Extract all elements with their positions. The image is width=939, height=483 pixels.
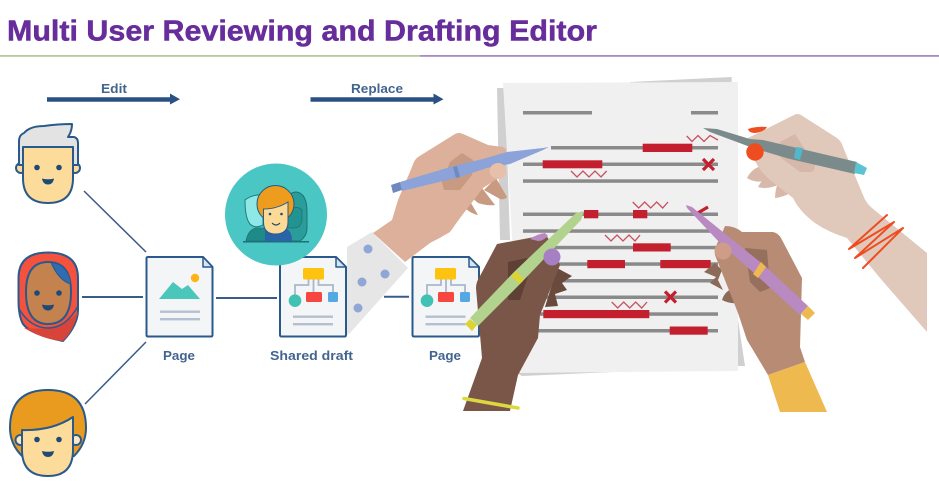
cuff (768, 362, 827, 412)
label: Page: Page (163, 348, 195, 363)
bracelet (464, 398, 518, 408)
hand: tan hand with blue pen (373, 133, 549, 262)
arrow: Replace (310, 81, 444, 104)
arrow: Replace: Replace (351, 81, 403, 96)
pen: purple (686, 205, 808, 315)
label: Shared draft: Shared draft (270, 348, 354, 363)
bracelet (849, 215, 903, 268)
icon: team badge (225, 164, 327, 266)
document: Page (146, 257, 212, 363)
hand: dark hand with green pen (463, 211, 584, 411)
text lines on paper (523, 111, 718, 332)
pen: grey (703, 128, 857, 174)
squiggle and cross marks (571, 136, 718, 308)
sleeve (347, 232, 408, 335)
person with orange hair (265, 229, 292, 241)
red edit highlights (543, 144, 711, 335)
document: Page (replaced) (412, 257, 479, 363)
arrow: Edit: Edit (101, 81, 128, 96)
pen: blue (400, 147, 549, 191)
man with pale hair (245, 195, 263, 227)
hand: brown hand with purple pen (686, 205, 827, 412)
woman in teal hijab (285, 192, 307, 241)
arrow: Edit (47, 81, 180, 104)
icon: user with grey hair (16, 124, 80, 203)
pen: green (470, 211, 584, 326)
document: Shared draft (270, 257, 354, 363)
paper stack (497, 77, 745, 376)
connector lines (82, 191, 409, 404)
icon: user with red hijab (18, 252, 78, 341)
icon: user with orange hair (10, 390, 86, 476)
title: Multi User Reviewing and Drafting Editor (7, 16, 597, 48)
hand: light hand with grey pen (703, 114, 927, 332)
label: Page: Page (429, 348, 461, 363)
